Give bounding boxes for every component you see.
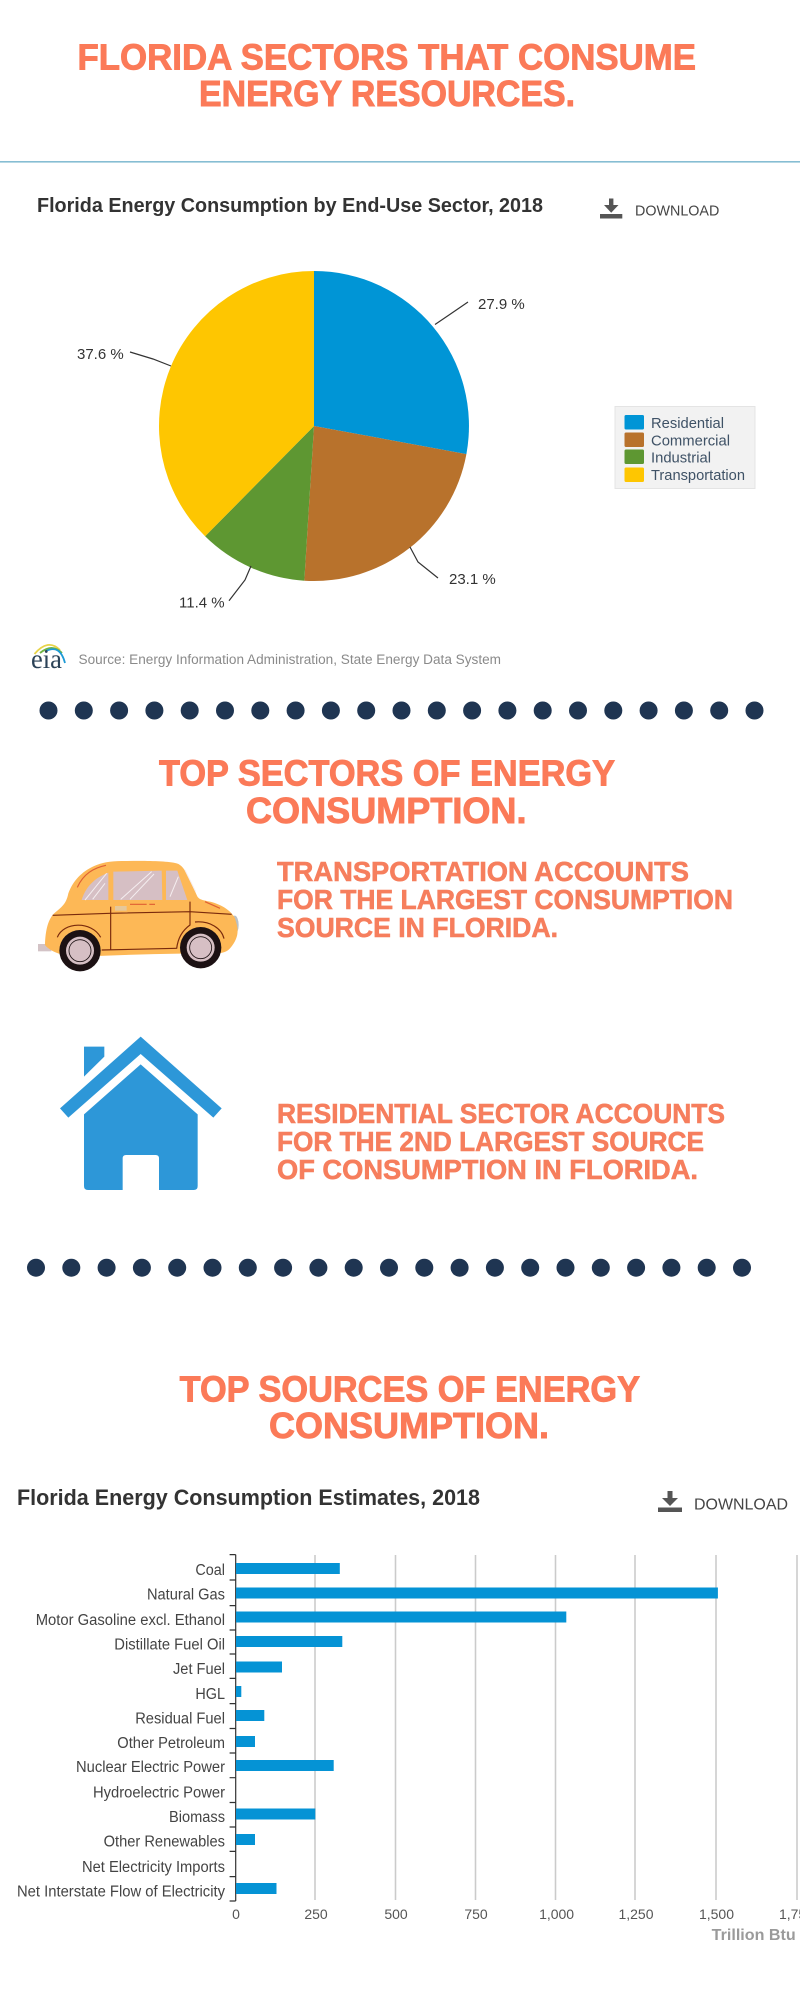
- category labels: Distillate Fuel Oil: [114, 1636, 225, 1653]
- text: residential: [277, 1098, 725, 1185]
- category labels: Nuclear Electric Power: [76, 1759, 225, 1776]
- category labels: Jet Fuel: [173, 1661, 225, 1678]
- text: transportation: FOR THE LARGEST CONSUMPTION: [277, 884, 733, 915]
- pie chart: [159, 271, 469, 581]
- text: transportation: SOURCE IN FLORIDA.: [277, 912, 558, 943]
- category labels: Natural Gas: [147, 1586, 225, 1603]
- text: residential: RESIDENTIAL SECTOR ACCOUNTS: [277, 1098, 725, 1129]
- x axis labels: 500: [384, 1906, 408, 1922]
- pie value labels: 23.1 %: [449, 571, 496, 588]
- pie value labels: 27.9 %: [478, 296, 525, 313]
- heading: top sectors: TOP SECTORS OF ENERGY: [159, 752, 615, 794]
- icon: eia logo: eia: [31, 644, 62, 674]
- title: ENERGY RESOURCES.: [199, 73, 575, 114]
- legend: Commercial: [651, 432, 730, 450]
- download label: DOWNLOAD: [694, 1497, 788, 1514]
- text: residential: OF CONSUMPTION IN FLORIDA.: [277, 1154, 698, 1185]
- icon: car: [38, 861, 239, 971]
- x axis labels: 250: [304, 1906, 328, 1922]
- category labels: Coal: [195, 1562, 225, 1579]
- category labels: Other Renewables: [104, 1833, 225, 1850]
- text: transportation: [277, 856, 733, 943]
- icon: download: [600, 198, 622, 218]
- legend: Industrial: [651, 450, 711, 466]
- category labels: Biomass: [169, 1809, 225, 1826]
- pie value labels: 37.6 %: [77, 346, 124, 363]
- x axis unit: Trillion Btu: [712, 1927, 796, 1944]
- heading: top sources: TOP SOURCES OF ENERGY: [180, 1368, 640, 1409]
- pie value labels: 11.4 %: [179, 594, 225, 612]
- chart title: Florida Energy Consumption by End-Use Sector, 2018: [37, 195, 543, 217]
- panel: pie chart by end-use sector: [31, 195, 755, 674]
- y axis: [230, 1555, 236, 1901]
- text: transportation: TRANSPORTATION ACCOUNTS: [277, 856, 689, 887]
- title: FLORIDA SECTORS THAT CONSUME: [78, 36, 696, 78]
- category labels: [17, 1562, 225, 1900]
- icon: download: [658, 1491, 682, 1512]
- heading: top sources: [180, 1368, 640, 1446]
- x axis labels: [232, 1906, 800, 1922]
- x axis labels: 1,500: [699, 1906, 734, 1922]
- pie value labels: [77, 296, 525, 612]
- heading: top sectors: [159, 752, 615, 831]
- panel: bar chart of consumption estimates: [17, 1485, 800, 1944]
- icon: house: [60, 1037, 222, 1190]
- category labels: Net Interstate Flow of Electricity: [17, 1883, 225, 1900]
- grid lines: [315, 1555, 797, 1900]
- chart title: Florida Energy Consumption Estimates, 2018: [17, 1485, 480, 1510]
- category labels: Net Electricity Imports: [82, 1859, 225, 1876]
- x axis labels: 750: [464, 1906, 488, 1922]
- x axis labels: 1,000: [539, 1906, 574, 1922]
- legend: [615, 406, 755, 488]
- category labels: Motor Gasoline excl. Ethanol: [36, 1612, 225, 1629]
- heading: top sectors: CONSUMPTION.: [246, 790, 526, 831]
- category labels: Hydroelectric Power: [93, 1784, 225, 1802]
- pie leader lines: [130, 302, 468, 601]
- category labels: Other Petroleum: [117, 1735, 225, 1752]
- x axis labels: 0: [232, 1906, 240, 1922]
- text: residential: FOR THE 2ND LARGEST SOURCE: [277, 1126, 704, 1157]
- legend: Residential: [651, 415, 724, 432]
- title: [78, 36, 696, 114]
- download label: DOWNLOAD: [635, 203, 719, 220]
- legend: Transportation: [651, 467, 745, 484]
- category labels: HGL: [195, 1686, 225, 1703]
- source note: Source: Energy Information Administration, State Energy Data System: [78, 652, 501, 667]
- bars: [236, 1563, 718, 1894]
- heading: top sources: CONSUMPTION.: [269, 1405, 549, 1446]
- x axis labels: 1,250: [618, 1906, 654, 1922]
- category labels: Residual Fuel: [135, 1710, 225, 1727]
